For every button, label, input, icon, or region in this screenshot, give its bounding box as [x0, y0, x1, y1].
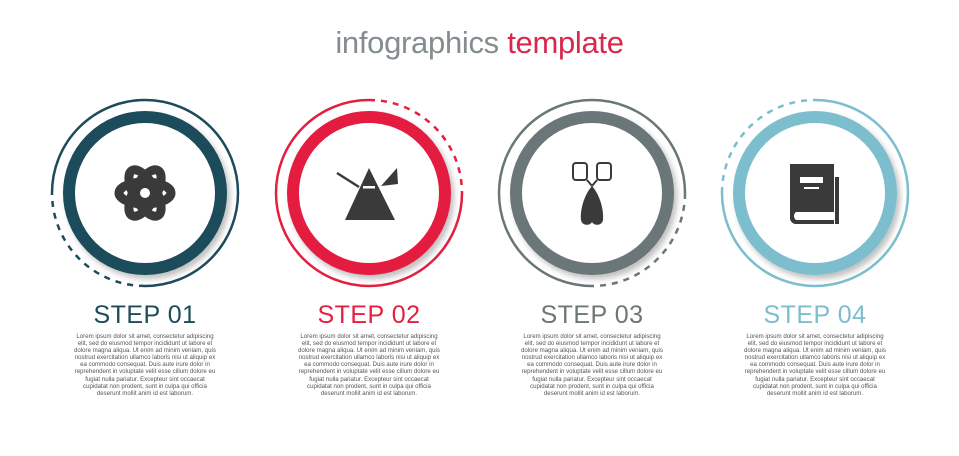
circle: step 04: [722, 100, 908, 286]
circles graphic: [50, 98, 910, 288]
icon: book: [790, 164, 839, 224]
step 04 text: Lorem ipsum dolor sit amet, consectetur adipiscing elit, sed do eiusmod tempor incididunt ut labore et dolore magna aliqua. Ut enim ad minim veniam, quis nostrud exercitation ullamco laboris nisi ut aliquip ex ea commodo consequat. Duis aute irure dolor in reprehendent in voluptate velit esse cillum dolore eu fugiat nulla pariatur. Excepteur sint occaecat cupidatat non prodent, sunt in culpa qui officia deserunt mollit anim id est laborum.: [744, 333, 886, 397]
circle: step 01: [52, 100, 238, 286]
step 02 text: STEP 02: [317, 301, 421, 329]
step 01 text: STEP 01: [93, 301, 197, 329]
step 03 text: STEP 03: [540, 301, 644, 329]
step 01 text: [74, 301, 216, 397]
icon: scissors: [573, 163, 611, 225]
step 03 text: Lorem ipsum dolor sit amet, consectetur adipiscing elit, sed do eiusmod tempor incididunt ut labore et dolore magna aliqua. Ut enim ad minim veniam, quis nostrud exercitation ullamco laboris nisi ut aliquip ex ea commodo consequat. Duis aute irure dolor in reprehendent in voluptate velit esse cillum dolore eu fugiat nulla pariatur. Excepteur sint occaecat cupidatat non prodent, sunt in culpa qui officia deserunt mollit anim id est laborum.: [521, 333, 663, 397]
step 02 text: [298, 301, 440, 397]
icon: atom: [119, 165, 171, 221]
step 04 text: [744, 301, 886, 397]
title: infographics template: [335, 25, 624, 60]
step 03 text: [521, 301, 663, 397]
step 04 text: STEP 04: [763, 301, 867, 329]
circle: step 02: [276, 100, 462, 286]
circle: step 03: [499, 100, 685, 286]
step 02 text: Lorem ipsum dolor sit amet, consectetur adipiscing elit, sed do eiusmod tempor incididunt ut labore et dolore magna aliqua. Ut enim ad minim veniam, quis nostrud exercitation ullamco laboris nisi ut aliquip ex ea commodo consequat. Duis aute irure dolor in reprehendent in voluptate velit esse cillum dolore eu fugiat nulla pariatur. Excepteur sint occaecat cupidatat non prodent, sunt in culpa qui officia deserunt mollit anim id est laborum.: [298, 333, 440, 397]
icon: prism: [337, 168, 398, 220]
step 01 text: Lorem ipsum dolor sit amet, consectetur adipiscing elit, sed do eiusmod tempor incididunt ut labore et dolore magna aliqua. Ut enim ad minim veniam, quis nostrud exercitation ullamco laboris nisi ut aliquip ex ea commodo consequat. Duis aute irure dolor in reprehendent in voluptate velit esse cillum dolore eu fugiat nulla pariatur. Excepteur sint occaecat cupidatat non prodent, sunt in culpa qui officia deserunt mollit anim id est laborum.: [74, 333, 216, 397]
